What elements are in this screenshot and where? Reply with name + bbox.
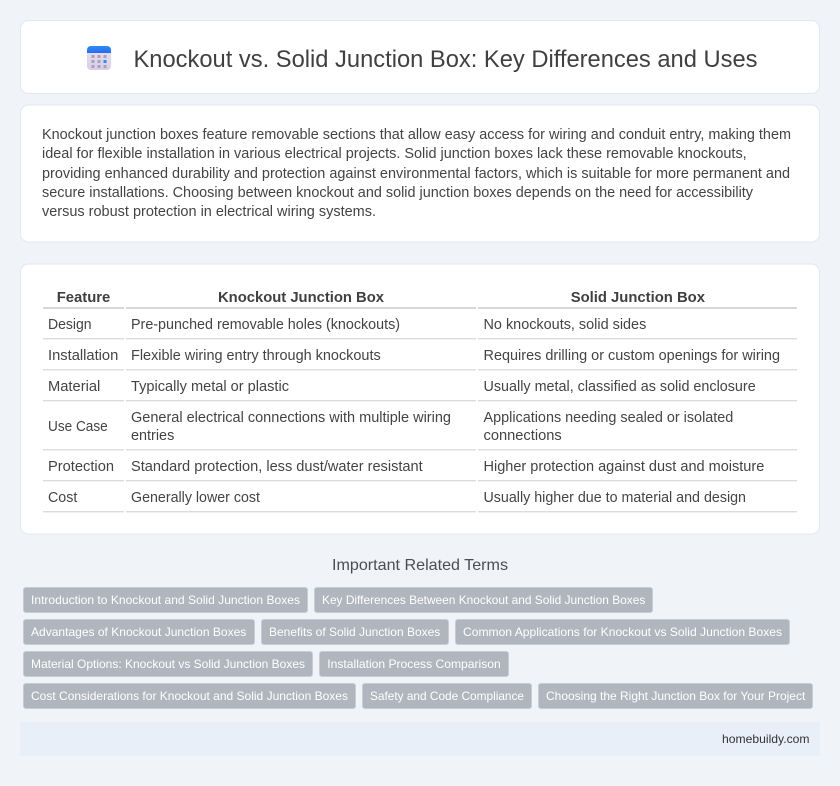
tag: [24, 684, 356, 708]
table row: protection: Higher protection against dust and moisture: [484, 459, 764, 475]
text block: introduction: secure installations. Choosing between knockout and solid junction boxes depends on the need for accessibility: [42, 185, 754, 201]
tag: Installation Process Comparison: [327, 657, 501, 671]
tag: [262, 620, 448, 644]
tag: Material Options: Knockout vs Solid Junction Boxes: [31, 657, 305, 671]
table row: cost: Cost: [48, 490, 77, 506]
text block: introduction: versus robust protection in electrical wiring systems.: [42, 204, 376, 220]
tag: [24, 652, 312, 676]
tag: Benefits of Solid Junction Boxes: [269, 625, 440, 639]
icon: calendar: [87, 46, 111, 70]
table row: use case: Use Case: [48, 419, 108, 435]
table row: protection: Protection: [48, 459, 114, 475]
related term tags: [24, 588, 812, 708]
tag: Introduction to Knockout and Solid Junction Boxes: [31, 593, 300, 607]
table row: material: Typically metal or plastic: [131, 379, 289, 395]
text block: introduction: ideal for flexible installation in various electrical projects. Solid junction boxes lack these removable knockouts,: [42, 146, 747, 162]
table row: cost: [43, 490, 797, 512]
title: Knockout vs. Solid Junction Box: Key Differences and Uses: [134, 46, 758, 73]
table row: material: Usually metal, classified as solid enclosure: [484, 379, 756, 395]
table row: installation: Flexible wiring entry through knockouts: [131, 348, 381, 364]
table header row: Solid Junction Box: [571, 289, 706, 306]
table row: use case: connections: [484, 428, 562, 444]
tag: Common Applications for Knockout vs Solid Junction Boxes: [463, 625, 782, 639]
tag: [314, 588, 652, 612]
table row: protection: Standard protection, less dust/water resistant: [131, 459, 423, 475]
table row: use case: [43, 410, 797, 450]
table row: use case: entries: [131, 428, 174, 444]
tag: Key Differences Between Knockout and Solid Junction Boxes: [322, 593, 645, 607]
tag: Choosing the Right Junction Box for Your Project: [546, 689, 806, 703]
footer: site name: homebuildy.com: [722, 732, 810, 746]
tag: Safety and Code Compliance: [370, 689, 524, 703]
table header row: Feature: [57, 289, 110, 306]
table row: cost: Usually higher due to material and design: [484, 490, 746, 506]
table row: cost: Generally lower cost: [131, 490, 260, 506]
text block: introduction: [42, 127, 791, 220]
table row: installation: Installation: [48, 348, 118, 364]
text block: introduction: providing enhanced durability and protection against environmental factors, which is suitable for more permanent and: [42, 166, 790, 182]
text block: introduction: Knockout junction boxes feature removable sections that allow easy access for wiring and conduit entry, making them: [42, 127, 791, 143]
tag: [24, 620, 254, 644]
footer: [20, 722, 820, 756]
tag: [24, 588, 308, 612]
heading: important related terms: Important Related Terms: [332, 557, 508, 574]
tag: [538, 684, 812, 708]
table row: design: Design: [48, 317, 92, 333]
table row: design: [43, 317, 797, 339]
table row: design: No knockouts, solid sides: [484, 317, 646, 333]
table row: material: [43, 379, 797, 401]
table header row: Knockout Junction Box: [218, 289, 385, 306]
tag: [362, 684, 532, 708]
panel: introduction paragraph: [20, 105, 820, 242]
table row: protection: [43, 459, 797, 481]
table row: installation: Requires drilling or custom openings for wiring: [484, 348, 780, 364]
table row: installation: [43, 348, 797, 370]
tag: [320, 652, 508, 676]
table header row: [43, 289, 797, 309]
panel: title header: [20, 20, 820, 94]
table row: material: Material: [48, 379, 100, 395]
table row: use case: Applications needing sealed or isolated: [484, 410, 733, 426]
table row: use case: General electrical connections with multiple wiring: [131, 410, 451, 426]
tag: Advantages of Knockout Junction Boxes: [31, 625, 246, 639]
tag: Cost Considerations for Knockout and Solid Junction Boxes: [31, 689, 348, 703]
table row: design: Pre-punched removable holes (knockouts): [131, 317, 400, 333]
panel: comparison table: [20, 264, 820, 534]
tag: [456, 620, 790, 644]
